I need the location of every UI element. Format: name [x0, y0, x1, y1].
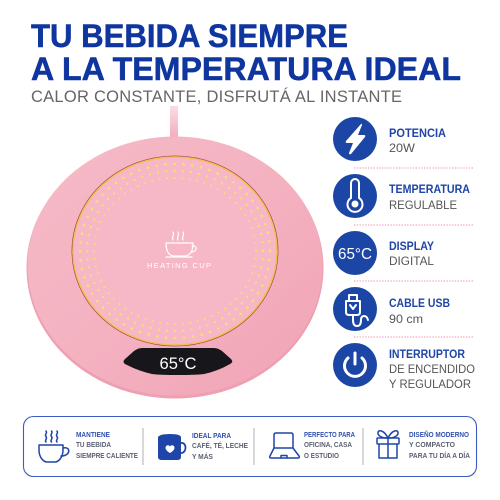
benefit: mantiene: SIEMPRE CALIENTE: [76, 453, 138, 460]
icon: mug with heart: [158, 434, 186, 460]
benefit: diseño moderno: [377, 430, 470, 460]
benefit: diseño moderno: PARA TU DÍA A DÍA: [409, 451, 470, 460]
benefit: ideal para: IDEAL PARA: [192, 433, 231, 440]
spec: interruptor: INTERRUPTOR: [389, 349, 466, 361]
spec: display: DISPLAY: [389, 241, 434, 253]
benefit: ideal para: CAFÉ, TÉ, LECHE: [192, 441, 248, 450]
product: heating cup coaster: [26, 106, 324, 398]
benefit: mantiene: [39, 431, 138, 462]
logo text: HEATING CUP: [147, 261, 211, 270]
coaster body: [26, 136, 324, 398]
icon: lightning: [333, 117, 377, 161]
icon: gift: [377, 431, 399, 458]
icon: laptop: [270, 433, 299, 458]
benefit: perfecto para: OFICINA, CASA: [304, 442, 352, 449]
title: TU BEBIDA SIEMPRE: [31, 18, 348, 54]
spec: interruptor: [333, 343, 475, 391]
spec: temperatura: REGULABLE: [389, 200, 457, 212]
icon: power: [333, 343, 377, 387]
bottom benefits panel: [24, 416, 476, 476]
title: A LA TEMPERATURA IDEAL: [31, 51, 461, 87]
display: [124, 348, 232, 375]
icon: hot cup: [39, 431, 69, 462]
benefit: mantiene: TU BEBIDA: [76, 442, 111, 449]
spec: temperatura: [333, 174, 470, 218]
title: [31, 18, 461, 87]
cup logo: [166, 232, 196, 257]
spec: potencia: [333, 117, 446, 161]
benefit: mantiene: MANTIENE: [76, 432, 110, 439]
benefit: ideal para: Y MÁS: [192, 452, 213, 461]
icon: thermometer: [333, 174, 377, 218]
gold ring: [72, 156, 278, 346]
benefit: diseño moderno: Y COMPACTO: [409, 442, 456, 449]
benefit: ideal para: [158, 433, 248, 461]
icon: usb plug: [333, 287, 377, 331]
spec: potencia: POTENCIA: [389, 128, 446, 140]
spec: cable usb: CABLE USB: [389, 298, 450, 310]
display: 65°C: [160, 354, 196, 373]
heating dots: [80, 164, 270, 338]
spec: potencia: 20W: [389, 143, 415, 155]
spec: interruptor: Y REGULADOR: [389, 379, 471, 391]
subtitle: CALOR CONSTANTE, DISFRUTÁ AL INSTANTE: [31, 87, 402, 106]
spec: cable usb: 90 cm: [389, 314, 423, 326]
benefit: perfecto para: PERFECTO PARA: [304, 432, 355, 439]
icon: 65 degrees: 65°C: [338, 246, 372, 263]
spec: temperatura: TEMPERATURA: [389, 184, 470, 196]
spec: cable usb: [333, 287, 450, 331]
spec: interruptor: DE ENCENDIDO: [389, 364, 475, 376]
spec: display: DIGITAL: [389, 256, 435, 268]
spec: display: [333, 231, 435, 275]
benefit: perfecto para: [270, 432, 355, 460]
benefit: perfecto para: O ESTUDIO: [304, 453, 339, 460]
cable: [170, 106, 178, 140]
benefit: diseño moderno: DISEÑO MODERNO: [409, 430, 470, 439]
